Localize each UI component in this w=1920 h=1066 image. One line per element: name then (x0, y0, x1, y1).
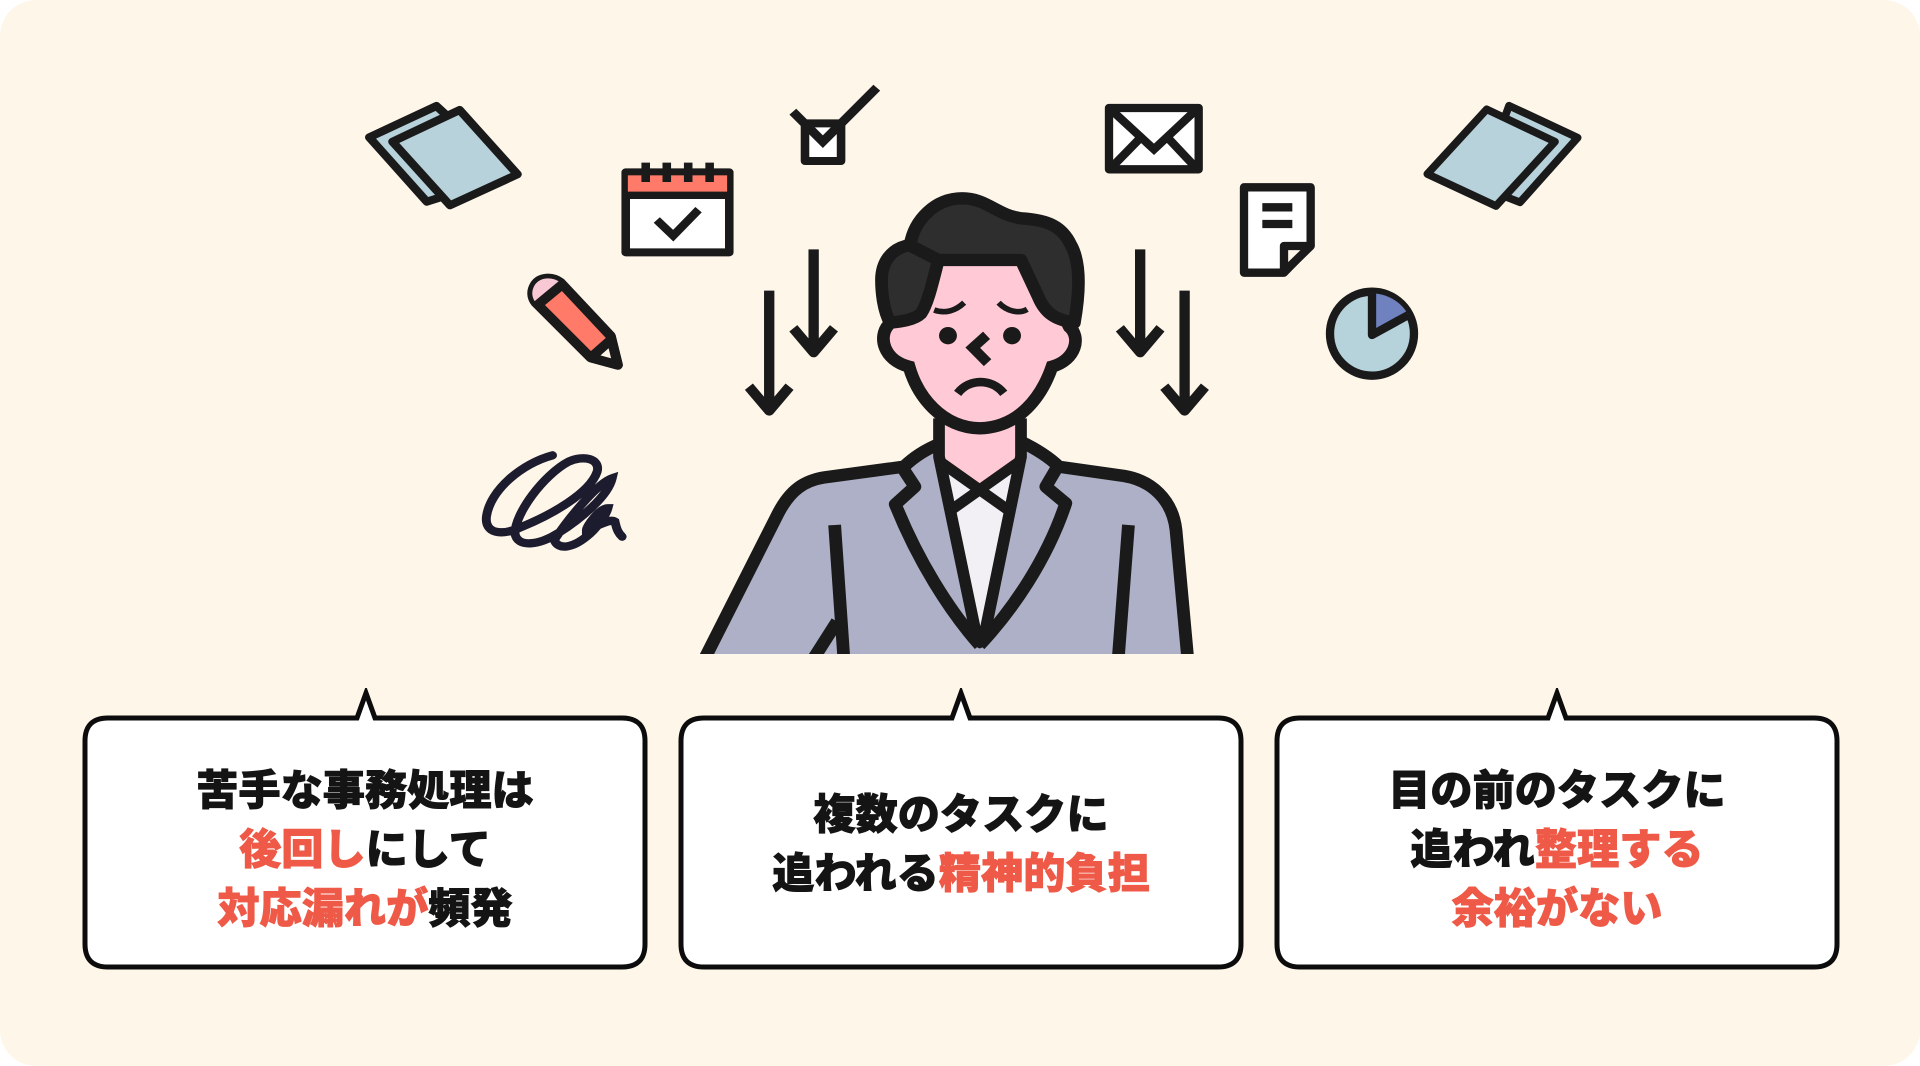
collar lines (940, 462, 1019, 509)
icon: stacked papers right (1427, 106, 1578, 206)
icon: envelope (1109, 108, 1199, 169)
text: left callout: 対応漏れが頻発 (217, 885, 513, 932)
arrow: left outer (749, 291, 790, 411)
hair (881, 198, 1078, 323)
eyebrows (934, 303, 1027, 312)
face (883, 237, 1075, 428)
arrow: right inner (1120, 249, 1160, 352)
icon: calendar (625, 163, 730, 252)
text: right callout: 追われ整理する (1410, 826, 1704, 873)
text: center callout (772, 791, 1150, 897)
nose (973, 335, 988, 363)
person (704, 198, 1188, 660)
sleeve seams (813, 525, 1128, 660)
icon: stacked papers left (369, 106, 517, 205)
icon: checkbox (793, 88, 877, 161)
arrow: left inner (793, 249, 834, 352)
text: right callout (1388, 767, 1726, 932)
icon: scribble signature (486, 455, 622, 547)
icon: pencil (532, 278, 618, 365)
text: left callout: 苦手な事務処理は (196, 767, 534, 814)
jacket (704, 442, 1188, 654)
neck (944, 425, 1016, 483)
text: center callout: 追われる精神的負担 (772, 850, 1150, 897)
icon: pie chart (1330, 292, 1414, 376)
text: right callout: 目の前のタスクに (1388, 767, 1726, 814)
text: center callout: 複数のタスクに (813, 791, 1109, 838)
icon: document (1244, 187, 1311, 273)
eyes (939, 327, 957, 344)
left lapel (895, 467, 980, 645)
shirt (948, 474, 1012, 626)
neck and V lines (939, 418, 1021, 638)
callout: right (1274, 688, 1840, 970)
text: right callout: 余裕がない (1452, 885, 1662, 932)
text: left callout: 後回しにして (239, 826, 491, 873)
right lapel (980, 467, 1066, 645)
mouth (958, 382, 1004, 393)
callout: left (82, 688, 648, 970)
text: left callout (196, 767, 534, 932)
arrow: right outer (1164, 291, 1205, 411)
illustration (365, 84, 1582, 654)
callout: center (678, 688, 1244, 970)
